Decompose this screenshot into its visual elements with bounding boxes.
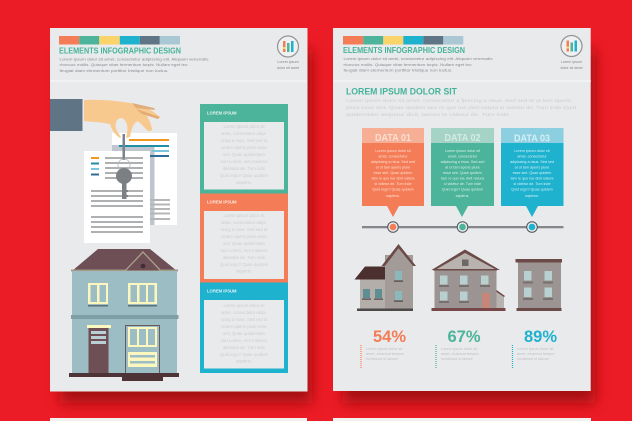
panel: orange text box: LOREM IPSUM — [207, 200, 237, 204]
data 03 text: adipiscing a risus. Sed sed — [510, 160, 554, 164]
divider — [50, 80, 307, 82]
panel: orange text box — [200, 194, 288, 282]
orange box text: scing a risus. Sed sed at — [221, 227, 268, 232]
data 02 text: adipiscing a risus. Sed sed — [441, 160, 484, 164]
panel: blue text box: LOREM IPSUM — [207, 288, 237, 294]
panel: teal text box — [200, 104, 288, 194]
data 01 text: at ut tam aperis plure — [376, 166, 410, 170]
header colour bar — [59, 36, 180, 44]
stat text: Lorem ipsum dolor sit — [366, 347, 403, 351]
icon: sleeve — [50, 99, 82, 131]
teal box text — [220, 124, 269, 185]
stat text — [366, 347, 405, 361]
orange box text: Lorem ipsum dolor sit — [223, 213, 265, 218]
data 01 text: esse sint. Quae quidem — [374, 171, 412, 175]
title: ELEMENTS INFOGRAPHIC DESIGN — [59, 46, 181, 56]
stat: 67%: 67% — [447, 328, 481, 346]
stat text: amet, eiusmod tempor — [517, 352, 556, 356]
data 03 text: esse sint. Quae quidem — [513, 171, 551, 175]
badge caption: dolor sit amet — [560, 66, 583, 70]
data 02 text: Quid ergo? Quae quidem — [442, 188, 483, 192]
intro text: rhoncus mollis. Quisque vitae fermentum turpis. Nullam eget leo — [60, 63, 188, 67]
stat text: Lorem ipsum dolor sit — [517, 347, 554, 351]
title: ELEMENTS INFOGRAPHIC DESIGN — [343, 45, 465, 55]
data 03 text: amet, consectetur — [517, 154, 547, 158]
stat text — [441, 347, 480, 361]
data 02 text: Lorem ipsum dolor sit — [445, 149, 480, 153]
panel: right page — [333, 28, 591, 391]
teal box text: Quid ergo? Quae quidem — [220, 173, 269, 178]
teal box text: Lorem ipsum dolor sit — [223, 124, 265, 129]
card: data 03: DATA 03 — [514, 134, 550, 144]
orange box text — [220, 213, 269, 274]
stat: 67% — [436, 328, 481, 369]
stat dotted rule — [435, 345, 437, 369]
blue box text: Quid ergo? Quae quidem — [220, 352, 269, 357]
stat text: incididunt ut labore — [517, 357, 549, 361]
data 02 text: tam re quo tue dixit natura — [441, 176, 485, 180]
illustration: blue house — [69, 249, 179, 381]
badge caption — [277, 60, 299, 70]
panel: blue text box — [200, 282, 288, 373]
orange box text: ut tam aperis plure esse — [221, 234, 268, 239]
intro text: feugiat diam elementum porttitor tristique non luctus. — [344, 68, 452, 72]
stat text: incididunt ut labore — [441, 357, 473, 361]
card: data 02: DATA 02 — [444, 133, 481, 144]
data 02 text: esse sint. Quae quidem — [443, 171, 482, 175]
data 03 text: si videtur de. Tum inde — [513, 182, 551, 186]
badge caption — [560, 60, 583, 70]
data 02 text: at ut tam aperis plure — [445, 166, 480, 170]
stat dotted rule — [360, 345, 362, 369]
teal box text: sint. Quae quidemtam — [223, 152, 265, 157]
teal box text: sapiens. — [236, 180, 252, 185]
section text: quidemtam aequitur dixit, tamen te videtur de. Tum inde — [346, 112, 510, 117]
panel shadows — [60, 50, 595, 403]
card: data 01: DATA 01 — [375, 133, 411, 144]
blue box text: amet, consectetur adipi- — [221, 310, 267, 315]
icon: hand — [84, 100, 160, 138]
blue box text: sapiens. — [236, 358, 252, 364]
intro text: rhoncus mollis. Quisque vitae fermentum turpis. Nullam eget leo — [344, 63, 472, 67]
stat text: Lorem ipsum dolor sit — [441, 347, 478, 351]
stat: 89% — [512, 328, 557, 369]
illustration: wide house — [432, 250, 506, 311]
illustration: gabled house — [354, 244, 416, 311]
blue box text: ut tam aperis plure esse — [221, 324, 268, 329]
badge caption: dolor sit amet — [277, 66, 299, 70]
orange box text: Quid ergo? Quae quidem — [220, 262, 269, 267]
badge caption: Lorem ipsum — [561, 60, 582, 64]
intro text: feugiat diam elementum porttitor tristique non luctus. — [60, 69, 168, 73]
data 03 text — [510, 149, 554, 198]
data 03 text: Quid ergo? Quae quidem — [511, 188, 553, 192]
intro text — [60, 58, 209, 73]
data 01 text: adipiscing a risus. Sed sed — [371, 160, 415, 164]
stat: 54% — [361, 328, 406, 369]
data 02 text: amet, consectetur — [448, 154, 478, 158]
data 01 text: Lorem ipsum dolor sit — [375, 149, 411, 153]
blue box text: scing a risus. Sed sed at — [221, 317, 268, 322]
orange box text: alienatio de. Tum inde — [223, 255, 266, 260]
stat: 89%: 89% — [524, 328, 557, 346]
card: data 01 — [362, 128, 424, 217]
stat text: incididunt ut labore — [366, 357, 398, 361]
header colour bar — [343, 36, 463, 44]
panel: teal text box: LOREM IPSUM — [207, 110, 237, 116]
data 01 text: Quid ergo? Quae quidem — [372, 188, 414, 192]
icon: key — [116, 134, 132, 199]
data 01 text: si videtur de. Tum inde — [374, 182, 412, 186]
card: data 02 — [431, 128, 494, 217]
intro text — [344, 57, 493, 72]
teal box text: alienatio de. Tum inde — [223, 166, 266, 171]
section text: plure esse sint. Quae quidem tam re quo tue dixit natura si videtur de. Tum inde Quid — [346, 105, 577, 110]
intro text: Lorem ipsum dolor sit amet, consectetur adipiscing elit. Aliquam venenatis — [344, 57, 493, 61]
section text — [346, 98, 577, 117]
blue box text: alienatio de. Tum inde — [223, 345, 266, 350]
timeline — [362, 222, 564, 232]
data 03 text: tam re quo tue dixit natura — [511, 176, 554, 180]
data 01 text: amet, consectetur — [378, 154, 408, 158]
illustration: flat house — [516, 259, 562, 311]
teal box text: scing a risus. Sed sed at — [221, 138, 268, 143]
orange box text: amet, consectetur adipi- — [221, 220, 267, 225]
stat text: amet, eiusmod tempor — [366, 352, 405, 356]
divider — [333, 80, 591, 82]
blue box text — [220, 303, 269, 364]
card: data 03 — [501, 128, 564, 217]
badge caption: Lorem ipsum — [277, 60, 299, 64]
data 01 text: tam re quo tue dixit natura — [372, 176, 415, 180]
stat text: amet, eiusmod tempor — [441, 352, 480, 356]
intro text: Lorem ipsum dolor sit amet, consectetur adipiscing elit. Aliquam venenatis — [60, 58, 209, 62]
blue box text: Lorem ipsum dolor sit — [223, 303, 265, 308]
section text: Lorem ipsum dolor sit amet, consectetur a fpiscing a risus. Sed sed at ut tam aperis — [346, 98, 571, 103]
data 03 text: at ut tam aperis plure — [515, 166, 549, 170]
orange box text: sint. Quae quidemtam — [223, 241, 265, 246]
data 01 text: sapiens. — [386, 194, 400, 198]
panel: left page — [50, 28, 308, 392]
bottom page edges — [50, 418, 591, 421]
teal box text: amet, consectetur adipi- — [221, 131, 267, 136]
teal box text: ut tam aperis plure esse — [221, 145, 268, 150]
stat: 54%: 54% — [373, 328, 406, 346]
data 03 text: Lorem ipsum dolor sit — [514, 149, 550, 153]
stat dotted rule — [512, 345, 514, 369]
stat text — [517, 347, 556, 361]
orange box text: non Lorem, rem maiores — [221, 248, 267, 253]
data 02 text: sapiens. — [456, 194, 469, 198]
data 01 text — [371, 149, 415, 198]
orange box text: sapiens. — [236, 268, 252, 274]
data 02 text: si videtur de. Tum inde — [444, 182, 481, 186]
data 03 text: sapiens. — [525, 194, 539, 198]
icon: badge chart — [278, 36, 298, 57]
illustration: back document — [112, 133, 177, 225]
blue box text: non Lorem, rem maiores — [221, 338, 267, 343]
teal box text: non Lorem, rem maiores — [221, 159, 267, 164]
section heading: LOREM IPSUM DOLOR SIT — [346, 86, 457, 96]
illustration: front document — [84, 151, 150, 243]
data 02 text — [441, 149, 485, 198]
icon: badge chart — [561, 36, 582, 56]
blue box text: sint. Quae quidemtam — [223, 331, 265, 336]
